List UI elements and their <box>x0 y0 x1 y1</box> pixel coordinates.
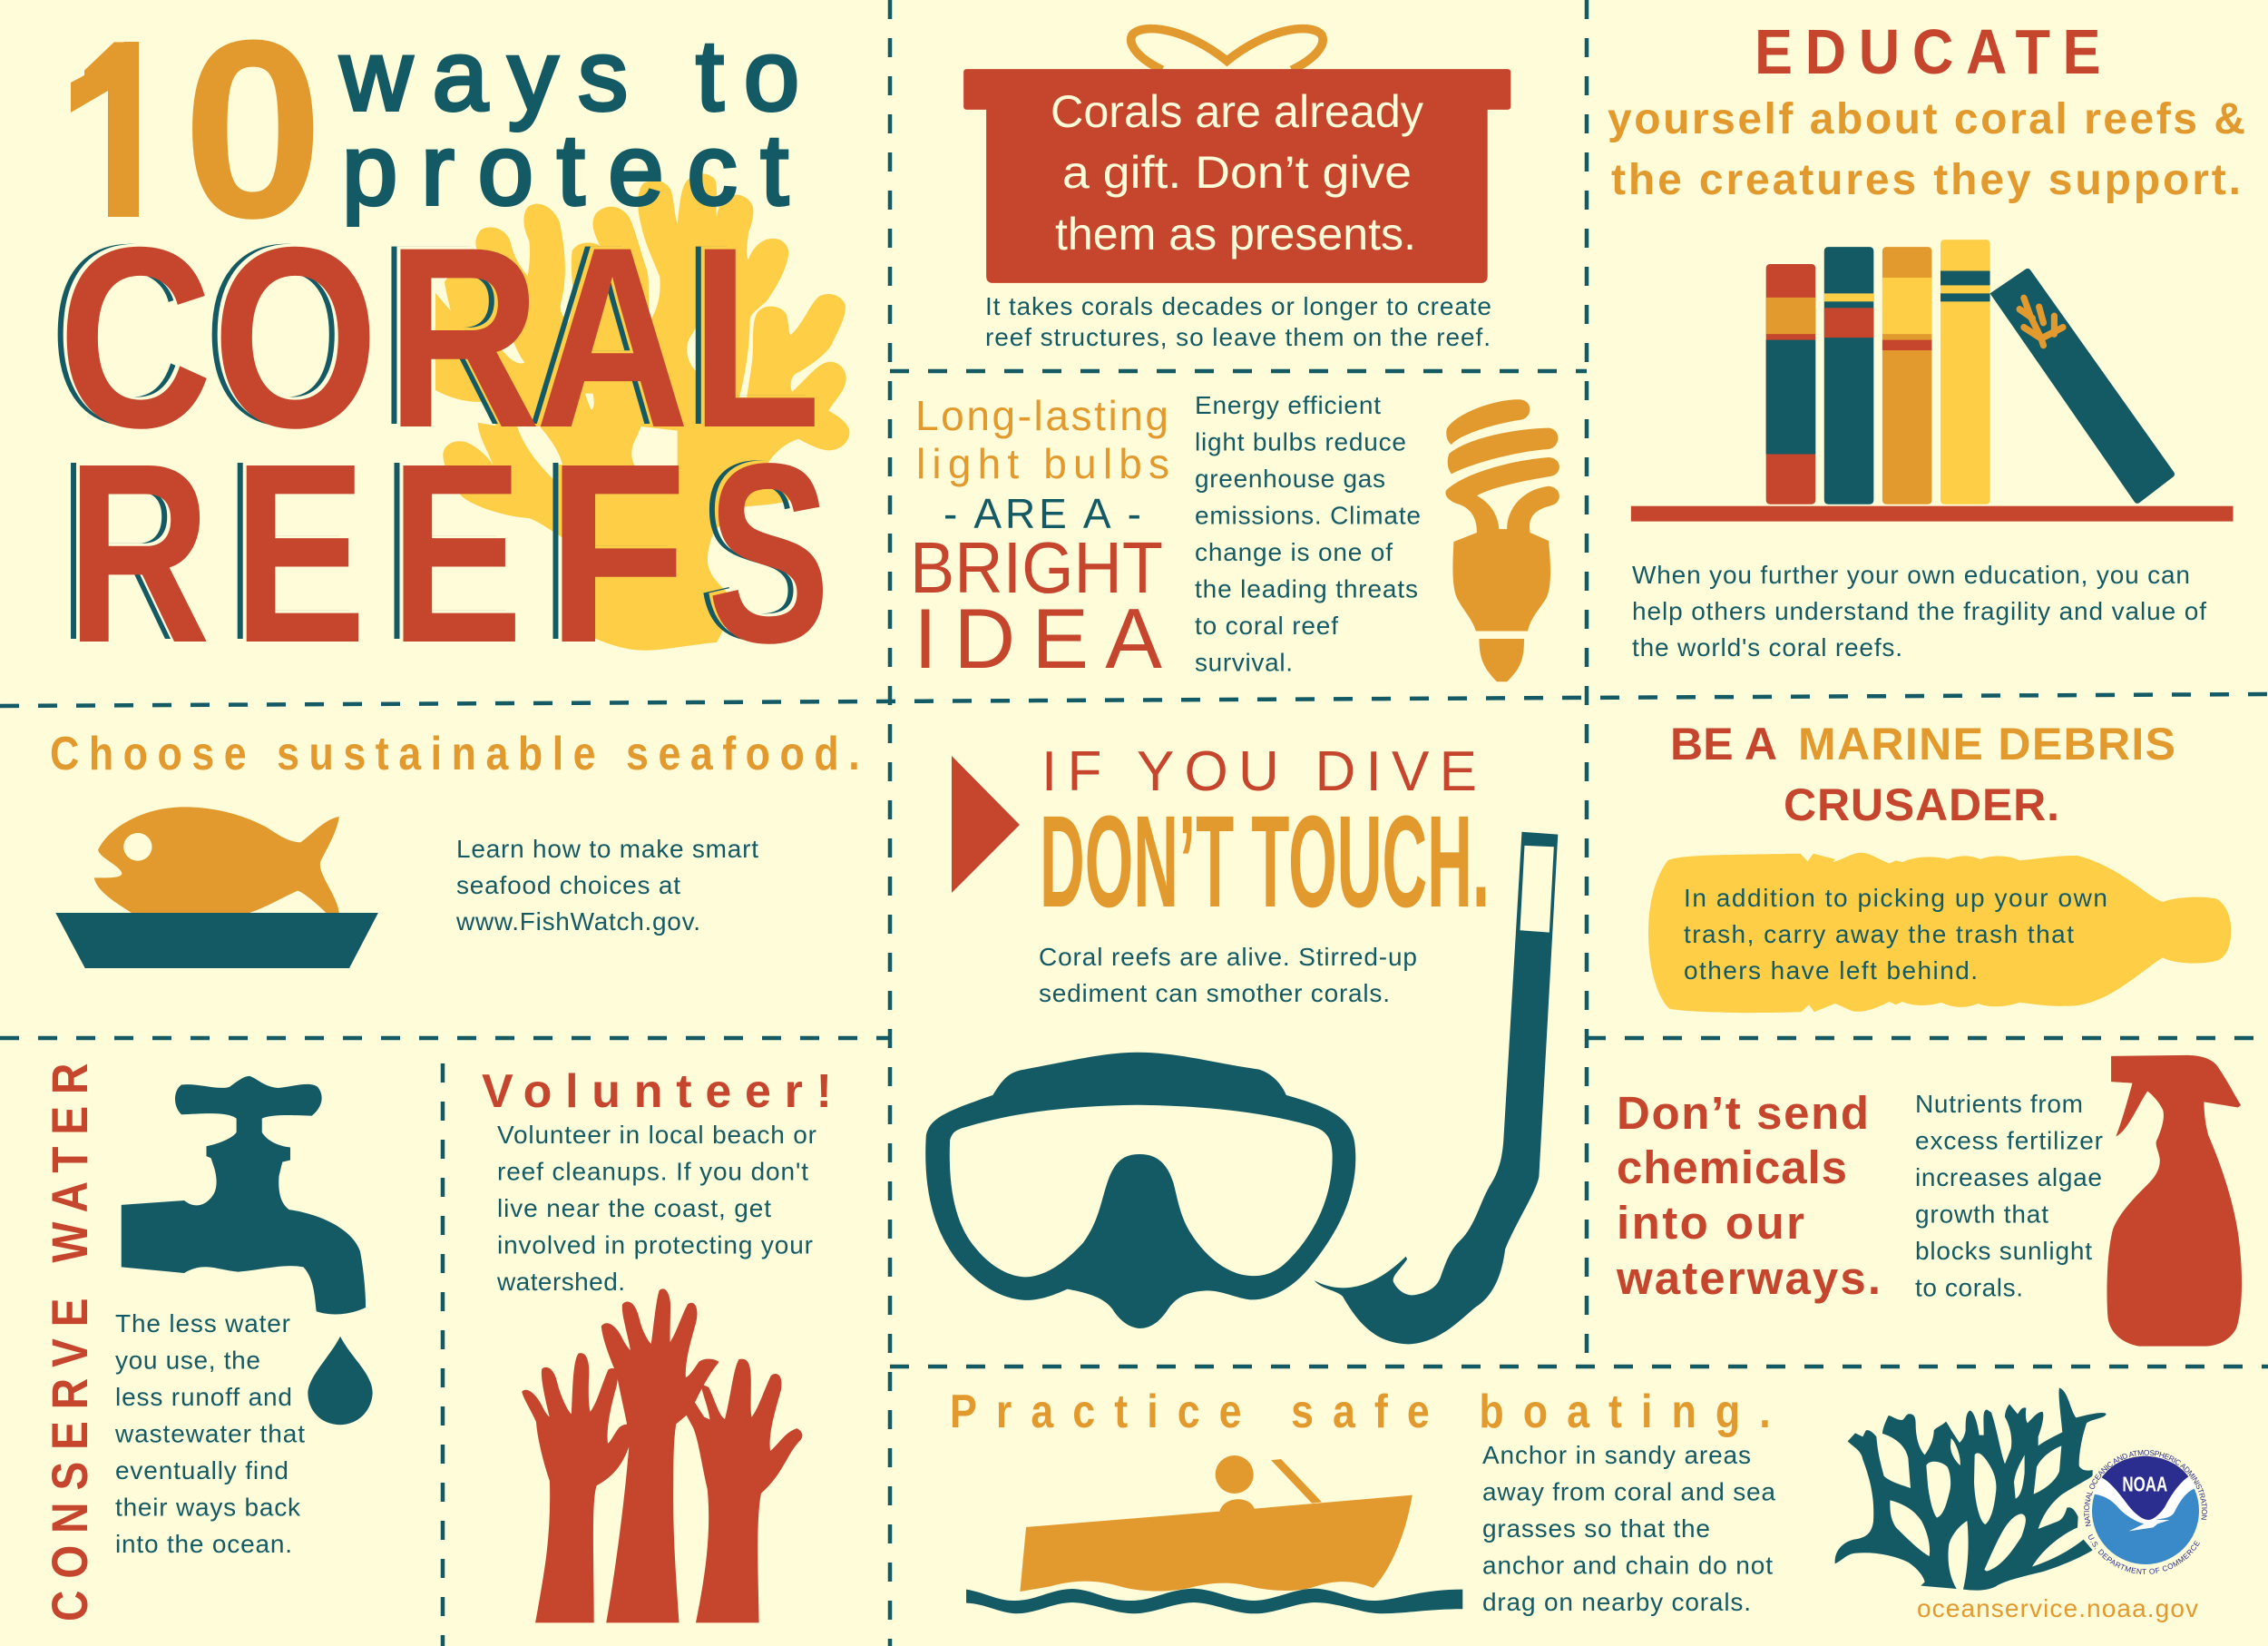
panel: safe boating <box>950 1386 1775 1616</box>
icon: bottle <box>1648 853 2231 1013</box>
website url: oceanservice.noaa.gov <box>1917 1594 2198 1622</box>
chemicals text <box>1915 1090 2103 1301</box>
water text: their ways back <box>115 1494 301 1521</box>
heading: reefs: S <box>708 411 830 697</box>
educate text: help others understand the fragility and value of <box>1632 597 2206 625</box>
heading: marine debris <box>1670 719 2175 830</box>
bulbs text: greenhouse gas <box>1195 465 1385 493</box>
bulbs text: emissions. Climate <box>1195 501 1421 530</box>
panel: chemicals <box>1616 1055 2242 1347</box>
dive text: sediment can smother corals. <box>1039 979 1390 1007</box>
icon: NOAA logo: NATIONAL OCEANIC AND ATMOSPHERIC ADMINISTRATION <box>2084 1450 2207 1526</box>
panel: educate <box>1608 17 2245 661</box>
heading: bright idea: - ARE A - <box>943 490 1141 537</box>
heading: bright idea <box>910 392 1169 686</box>
heading: reefs: REE <box>57 407 513 693</box>
panel: title <box>49 0 849 697</box>
bottle text: trash, carry away the trash that <box>1684 920 2074 948</box>
boating text: drag on nearby corals. <box>1482 1588 1751 1616</box>
heading: coral: CORAL <box>58 194 821 482</box>
water text: wastewater that <box>114 1419 305 1448</box>
volunteer text: watershed. <box>496 1268 625 1296</box>
icon: NOAA logo: U.S. DEPARTMENT OF COMMERCE <box>2088 1533 2200 1574</box>
heading: bright idea: Long-lasting <box>915 392 1168 439</box>
heading: chemicals: into our <box>1617 1197 1804 1249</box>
gift caption: It takes corals decades or longer to create <box>985 292 1491 320</box>
panel: if you dive <box>925 740 1558 1344</box>
gift caption: reef structures, so leave them on the reef. <box>985 323 1491 351</box>
heading: chemicals: chemicals <box>1617 1141 1847 1193</box>
bulbs text: light bulbs reduce <box>1195 428 1406 456</box>
heading: chemicals <box>1616 1087 1881 1304</box>
water text: you use, the <box>115 1347 260 1374</box>
bulbs text: the leading threats <box>1195 575 1418 603</box>
panel: footer logos <box>1834 1387 2207 1622</box>
heading: educate: the creatures they support. <box>1611 156 2241 204</box>
heading: seafood: Choose sustainable seafood. <box>50 728 860 780</box>
bottle text: others have left behind. <box>1684 956 1978 985</box>
water text: eventually find <box>115 1456 288 1484</box>
panel: gift <box>963 29 1510 351</box>
heading: reefs: S <box>699 408 821 694</box>
boating text <box>1482 1441 1775 1616</box>
heading: reefs: REE <box>66 410 523 696</box>
heading: if you dive: IF YOU DIVE <box>1041 740 1477 803</box>
boating text: anchor and chain do not <box>1482 1552 1773 1579</box>
bulbs text: Energy efficient <box>1195 391 1381 419</box>
boating text: grasses so that the <box>1482 1514 1710 1543</box>
dive text: Coral reefs are alive. Stirred-up <box>1039 943 1417 971</box>
seafood text: www.FishWatch.gov. <box>455 907 700 936</box>
heading: coral <box>58 243 815 429</box>
heading: reefs: F <box>546 410 688 696</box>
heading: marine debris: CRUSADER. <box>1784 779 2059 830</box>
gift caption <box>985 292 1491 351</box>
educate text: When you further your own education, you can <box>1632 561 2190 589</box>
volunteer text: live near the coast, get <box>497 1194 771 1222</box>
panel: conserve water <box>42 1063 373 1622</box>
icon: gift box <box>963 29 1510 283</box>
icon: yellow coral behind title <box>435 173 849 651</box>
seafood text: seafood choices at <box>456 871 680 899</box>
heading: educate <box>1608 17 2245 204</box>
dive text <box>1039 943 1417 1007</box>
heading: marine debris: BE A <box>1670 719 1777 769</box>
heading: reefs <box>71 460 823 644</box>
heading: marine debris: MARINE DEBRIS <box>1798 719 2175 769</box>
volunteer text: Volunteer in local beach or <box>497 1121 816 1149</box>
bottle text: In addition to picking up your own <box>1684 884 2107 912</box>
icon: boat <box>966 1455 1462 1613</box>
chemicals text: Nutrients from <box>1915 1090 2083 1118</box>
heading: bright idea: IDEA <box>914 591 1162 686</box>
chemicals text: growth that <box>1915 1200 2048 1229</box>
bulbs text: to coral reef <box>1195 612 1338 640</box>
bulbs text: change is one of <box>1195 538 1393 566</box>
panel: volunteer <box>482 1065 832 1622</box>
icon: raised hands <box>523 1289 801 1622</box>
chemicals text: to corals. <box>1915 1274 2023 1301</box>
heading: educate: EDUCATE <box>1755 17 2101 88</box>
panel: light bulbs <box>910 391 1559 686</box>
water text <box>114 1309 305 1558</box>
chemicals text: increases algae <box>1915 1163 2102 1191</box>
gift message: a gift. Don’t give <box>1062 147 1412 198</box>
gift message: them as presents. <box>1055 209 1416 260</box>
boating text: away from coral and sea <box>1482 1477 1775 1506</box>
heading: ways to protect: protect <box>342 114 788 226</box>
heading: safe boating: Practice safe boating. <box>950 1386 1771 1438</box>
icon: light bulb <box>1445 399 1559 681</box>
icon: red triangle <box>952 756 1020 893</box>
water text: less runoff and <box>115 1383 292 1411</box>
icon: fish on plate <box>55 807 378 968</box>
heading: coral: CORAL <box>49 191 812 479</box>
heading: chemicals: waterways. <box>1616 1252 1881 1304</box>
heading: bright idea: light bulbs <box>916 440 1169 487</box>
educate text <box>1632 561 2206 661</box>
panel: sustainable seafood <box>50 728 860 968</box>
heading: ways to protect: ways to <box>339 20 799 132</box>
bulbs text <box>1195 391 1421 677</box>
heading: volunteer: Volunteer! <box>482 1065 832 1118</box>
heading: educate: yourself about coral reefs & <box>1608 95 2245 143</box>
icon: faucet and drop <box>122 1076 373 1425</box>
heading: bright idea: BRIGHT <box>910 527 1163 608</box>
volunteer text <box>496 1121 816 1296</box>
chemicals text: excess fertilizer <box>1915 1127 2103 1154</box>
volunteer text: involved in protecting your <box>497 1230 813 1259</box>
panel: if you dive: DON’T TOUCH. <box>1040 789 1490 935</box>
educate text: the world's coral reefs. <box>1632 633 1902 661</box>
icon: mask and snorkel <box>925 832 1558 1344</box>
number 10 <box>50 0 324 271</box>
icon: NOAA logo: NOAA <box>2122 1472 2167 1495</box>
seafood text <box>455 835 758 936</box>
chemicals text: blocks sunlight <box>1915 1237 2092 1265</box>
water text: into the ocean. <box>115 1530 292 1558</box>
heading: reefs: F <box>537 407 679 693</box>
volunteer text: reef cleanups. If you don't <box>497 1158 808 1185</box>
heading: conserve water: CONSERVE WATER <box>42 1063 99 1622</box>
heading: ways to protect <box>339 20 799 226</box>
icon: spray bottle <box>2107 1055 2242 1347</box>
bulbs text: survival. <box>1195 648 1293 677</box>
icon: NOAA logo <box>2084 1450 2207 1574</box>
heading: chemicals: Don’t send <box>1617 1087 1869 1139</box>
panel: marine debris <box>1648 719 2231 1013</box>
gift message: Corals are already <box>1051 86 1423 137</box>
seafood text: Learn how to make smart <box>456 835 758 863</box>
bottle text <box>1684 884 2107 985</box>
boating text: Anchor in sandy areas <box>1482 1441 1751 1469</box>
icon: teal coral <box>1835 1387 2107 1591</box>
icon: books on shelf <box>1631 240 2234 522</box>
water text: The less water <box>115 1309 290 1337</box>
gift message <box>1051 86 1423 260</box>
